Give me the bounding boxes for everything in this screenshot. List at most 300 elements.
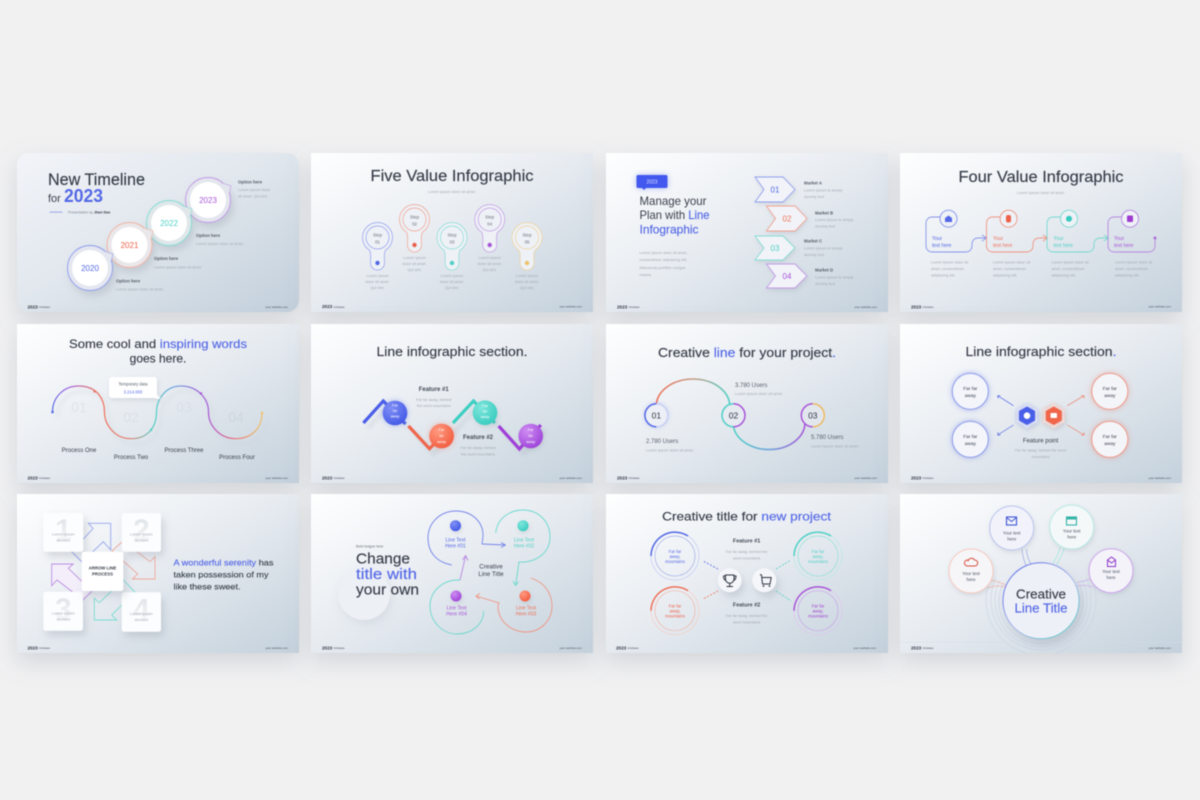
big numbers: 02: [123, 409, 139, 425]
card 3: Lorem Ipsum: [52, 610, 75, 616]
footer: Infobase: [922, 305, 934, 309]
text: descriptions: Lorem ipsum dolor sit: [931, 260, 969, 264]
node 01: Line Text: [446, 538, 466, 544]
text: feature point: Far far away, behind the word: [1015, 448, 1066, 452]
text: pin captions: Lorem ipsum: [516, 273, 538, 278]
pin: step 04: [475, 205, 505, 252]
text: option 2020: Lorem ipsum dolor sit amet.: [116, 286, 164, 292]
node 2022: [146, 200, 192, 246]
text: option 2020: Option here: [116, 278, 141, 284]
text: serenity: like these sweet.: [174, 582, 240, 592]
footer: Infobase: [628, 305, 640, 309]
footer: [911, 476, 1172, 480]
slide: Arrow line process: [17, 494, 299, 653]
hexagon: orange: [1043, 403, 1065, 428]
text: feature 2: [726, 602, 767, 624]
footer: Infobase: [628, 476, 640, 480]
ring: purple: [794, 587, 842, 635]
footer: your website.com: [1148, 304, 1172, 308]
circle: orange: Far: [439, 428, 445, 432]
loop: orange: [476, 578, 552, 632]
circle: top left: [952, 373, 988, 409]
node 2022: 2022: [160, 219, 178, 228]
title: Some cool and inspiring words: [69, 337, 247, 351]
circle: bottom left: Far far: [963, 434, 978, 440]
chevron 04: [766, 264, 807, 288]
zigzag lines: [363, 401, 541, 449]
text: users: 3.780 Users: [735, 383, 767, 389]
text: users: Lorem ipsum dolor sit amet.: [646, 448, 694, 452]
node 01: [645, 404, 668, 427]
flow: orange step: text here: [993, 243, 1013, 249]
card 3: 3: [55, 593, 72, 626]
card 4: decided: [134, 617, 148, 622]
arrow: orange: [112, 541, 155, 579]
text: pin captions: Lorem ipsum: [366, 273, 389, 278]
text: pin captions: Qui sint.: [445, 285, 459, 290]
text: descriptions: amet, consectetuer: [1052, 266, 1085, 271]
card 1: decided: [56, 538, 70, 542]
node 02: Here #02: [514, 544, 534, 550]
node 2023: 2023: [199, 196, 217, 205]
circle: top left: Far far: [963, 386, 978, 392]
circle: top left: away: [965, 394, 976, 399]
footer: your website.com: [266, 305, 289, 309]
text: users: Lorem ipsum dolor sit amet.: [735, 391, 783, 396]
text: descriptions: adipiscing elit.: [993, 272, 1017, 278]
node 02: [514, 520, 535, 550]
text: option 2023: [238, 180, 271, 198]
node 01: Here #01: [445, 544, 466, 550]
text: feature point: [1015, 438, 1066, 459]
node 03: [516, 590, 537, 618]
text: feature point: Feature point: [1023, 438, 1059, 444]
pin: step 03: Step: [447, 232, 457, 238]
text: pin captions: dolor sit amet.: [440, 279, 464, 284]
arrow: blue: [72, 523, 111, 562]
text: pin captions: dolor sit amet.: [477, 261, 502, 266]
footer: [911, 646, 1172, 650]
circle: teal: far: [483, 410, 488, 414]
flow: blue step: Your: [932, 236, 942, 242]
footer: 2023: [322, 646, 333, 650]
labels: processes: Process Four: [219, 455, 255, 461]
title: for 2023: 2023: [64, 185, 103, 206]
text: users: Lorem ipsum dolor sit amet.: [811, 444, 859, 448]
paragraph: Maecenas porttitor congue: [640, 265, 686, 270]
text: feature 2: [460, 435, 496, 456]
heading: [356, 550, 419, 598]
node 02: [722, 404, 745, 427]
footer: Infobase: [334, 476, 345, 480]
card: center: PROCESS: [92, 572, 113, 576]
text: markets: Market B: [815, 210, 833, 216]
loop: teal-purple: [430, 556, 484, 634]
circle: blue: Far: [392, 404, 399, 408]
slide: Manage your Plan: [606, 153, 888, 312]
ring: teal: away,: [813, 554, 823, 559]
circle: blue: far: [393, 409, 398, 413]
bubble: cloud: here: [966, 577, 976, 582]
text: pin captions: dolor sit amet.: [365, 279, 390, 284]
text: center title: [478, 564, 504, 578]
footer: [28, 476, 289, 480]
text: descriptions: amet, consectetuer: [931, 266, 965, 271]
text: serenity: taken possession of my: [174, 570, 269, 580]
text: feature 2: Far far away, behind: [460, 445, 496, 450]
pin: step 03: 03: [450, 240, 455, 244]
card 1: [43, 513, 83, 552]
heading: Manage your: [640, 194, 707, 208]
chevron 01: 01: [771, 186, 780, 194]
pin: step 02: Step: [410, 214, 420, 220]
chevron 02: 02: [783, 214, 792, 224]
footer: your website.com: [854, 646, 877, 650]
footer: 2023: [911, 646, 922, 650]
loop: blue: [428, 511, 506, 565]
ring: purple: away,: [813, 609, 823, 614]
title: Creative line for your project .: [658, 345, 836, 360]
pin: step 05: 05: [525, 240, 530, 244]
pin: step 01: 01: [375, 240, 380, 244]
slide: Line infographic section A: [311, 324, 593, 483]
text: pin captions: dolor sit amet.: [402, 261, 427, 266]
flow: purple step: Your: [1114, 236, 1124, 242]
text: users: 2.780 Users: [646, 439, 678, 445]
node 2020: 2020: [81, 264, 99, 273]
circle: purple: [518, 424, 543, 448]
slide: Change title with your own: [311, 494, 593, 653]
flow: teal step: Your: [1054, 236, 1064, 242]
slide: Five Value Infographic: [311, 153, 593, 312]
footer: Infobase: [922, 476, 934, 480]
title: Line infographic section.: [376, 344, 528, 359]
text: feature 2: Feature #2: [733, 602, 760, 608]
text: eyebrow: Bold tongue here: [356, 544, 383, 548]
big numbers: [71, 399, 244, 425]
footer: 2023: [28, 304, 38, 310]
text: markets: Market C: [804, 238, 822, 244]
pin: step 05: [512, 223, 542, 270]
title: goes here.: [130, 352, 186, 366]
node 02: 02: [729, 410, 738, 420]
text: descriptions: amet, consectetuer: [1115, 266, 1149, 271]
text: option 2020: [116, 278, 164, 292]
footer: 2023: [322, 304, 333, 309]
flow: teal step: [1047, 210, 1108, 252]
badge: 2023: 2023: [646, 180, 658, 186]
heading: title with: [356, 566, 417, 583]
labels: processes: Process Three: [165, 448, 204, 454]
ring: blue: mountains: [665, 559, 685, 564]
text: feature 1: Feature #1: [733, 538, 760, 544]
paragraph: [640, 250, 688, 277]
card 4: Lorem Ipsum: [130, 611, 153, 616]
ring: orange: mountains: [665, 614, 685, 619]
footer: [911, 304, 1172, 310]
arrows: orange: [1067, 396, 1084, 435]
footer: your website.com: [560, 304, 583, 308]
paragraph: Lorem ipsum dolor sit amet,: [640, 250, 688, 255]
text: option 2023: sit amet. Qui sint.: [238, 194, 268, 198]
text: option 2022: Lorem ipsum dolor sit amet.: [196, 241, 244, 246]
text: feature 1: Feature #1: [419, 387, 449, 393]
footer: 2023: [617, 476, 628, 480]
text: option 2023: Option here: [238, 180, 263, 184]
bubble: cloud: Your text: [962, 571, 981, 576]
pin: step 05: Step: [522, 232, 532, 238]
arcs: [656, 379, 805, 450]
node 03: 03: [808, 410, 818, 420]
flow: teal step: text here: [1054, 243, 1073, 249]
chevron 02: [766, 206, 807, 231]
bubble: mail: Your text: [1003, 530, 1021, 536]
paragraph: consectetuer adipiscing elit.: [640, 257, 687, 262]
slide: Four Value Infographic: [900, 153, 1182, 312]
footer: [322, 304, 583, 309]
callout: temporary data: 3.214.000: [124, 390, 143, 394]
text: option 2021: Lorem ipsum dolor sit amet.: [154, 264, 202, 270]
footer: your website.com: [560, 646, 583, 650]
text: pin captions: Lorem ipsum: [441, 273, 463, 278]
text: feature 2: the word mountains: [461, 452, 495, 456]
text: option 2023: Lorem ipsum dolor: [238, 187, 271, 192]
text: feature 1: Far far away, behind the: [726, 549, 767, 554]
card 1: Lorem Ipsum: [52, 532, 75, 536]
circle: top right: Far far: [1103, 386, 1117, 392]
text: feature 1: the word mountains: [417, 403, 451, 408]
card 4: [122, 592, 161, 632]
circle: orange: far: [439, 434, 445, 438]
ring: orange: [651, 587, 699, 635]
slide: Creative Line Title: [900, 494, 1182, 655]
decorative sphere: [338, 547, 414, 620]
pin: step 04: 04: [487, 222, 493, 226]
footer: [322, 476, 583, 480]
flow: orange step: [986, 210, 1048, 252]
text: markets: Lorem ipsum is simply: [815, 217, 854, 222]
footer: Infobase: [39, 646, 50, 650]
title: for 2023: for: [48, 193, 61, 205]
footer: 2023: [616, 646, 627, 650]
card 2: decided: [134, 538, 148, 542]
circle: bottom right: [1092, 421, 1128, 457]
circle: bottom right: Far far: [1103, 434, 1117, 440]
node 2023: [186, 178, 231, 222]
text: pin captions: Qui sint.: [370, 285, 385, 290]
footer: your website.com: [1148, 646, 1172, 650]
text: descriptions: adipiscing elit.: [931, 272, 955, 278]
ring: teal: mountains: [808, 559, 828, 564]
text: feature 1: [726, 538, 767, 560]
text: pin captions: Lorem ipsum: [403, 255, 426, 260]
subtitle: Lorem ipsum dolor sit amet.: [428, 189, 476, 194]
node 01: 01: [652, 410, 661, 420]
big numbers: 04: [228, 409, 244, 425]
text: center title: Line Title: [478, 571, 504, 578]
text: feature 1: [416, 387, 451, 408]
footer: 2023: [28, 476, 38, 480]
ring: blue: Far far: [669, 549, 682, 554]
card 2: [122, 513, 161, 552]
text: feature 1: Far far away, behind: [416, 397, 451, 402]
footer: Infobase: [39, 305, 50, 309]
circle: top right: away: [1104, 394, 1116, 399]
heading: your own: [356, 582, 419, 598]
footer: your website.com: [560, 476, 583, 480]
dashed arrows: [703, 560, 791, 601]
circle: bottom left: away: [965, 442, 976, 447]
bubble: calendar: here: [1067, 534, 1077, 540]
text: option 2022: Option here: [196, 233, 221, 238]
slide: Creative line for your project: [606, 324, 888, 483]
ring: purple: Far far: [812, 604, 825, 609]
text: option 2022: [196, 233, 244, 246]
circle: blue: [383, 401, 407, 425]
footer: [617, 304, 878, 310]
slide: New Timeline for 2023: [17, 153, 299, 312]
node 03: Here #03: [516, 612, 536, 618]
circle: orange: away: [437, 440, 446, 444]
text: pin captions: [365, 255, 539, 290]
text: markets: Lorem ipsum is simply: [815, 274, 854, 280]
text: feature 2: Far far away, behind the: [726, 613, 767, 618]
text: pin captions: Qui sint.: [407, 267, 422, 272]
heading: Plan with Line: [640, 208, 710, 222]
paragraph: massa.: [640, 272, 652, 277]
text: feature 2: Feature #2: [463, 435, 494, 441]
bubble: cloud: [949, 549, 1007, 593]
footer: 2023: [322, 476, 333, 480]
text: pin captions: Qui sint.: [483, 267, 497, 272]
title: Four Value Infographic: [958, 169, 1124, 186]
pin: step 02: [400, 205, 430, 252]
icon: trophy: [718, 568, 742, 592]
card 3: [43, 592, 83, 631]
text: feature point: mountains: [1032, 454, 1050, 459]
ring: orange: Far far: [669, 604, 682, 609]
big numbers: 01: [71, 399, 87, 415]
ring: teal: [794, 532, 842, 580]
title: New Timeline: New Timeline: [48, 171, 145, 189]
footer: your website.com: [854, 305, 878, 309]
footer: [28, 304, 289, 310]
footer: 2023: [28, 646, 38, 650]
footer: your website.com: [854, 476, 878, 480]
text: descriptions: adipiscing elit.: [1115, 272, 1139, 278]
text: pin captions: Lorem ipsum: [478, 255, 501, 260]
title: Five Value Infographic: [370, 168, 534, 185]
node 04: Here #04: [446, 612, 467, 618]
ring: orange: away,: [670, 609, 680, 614]
card 1: 1: [55, 514, 72, 547]
center circle: Line Title: [1014, 602, 1068, 616]
zigzag shadows: [368, 406, 546, 454]
footer: Infobase: [922, 646, 934, 650]
chevron 03: [755, 236, 795, 260]
circle: teal: away: [481, 415, 490, 419]
circle: bottom left: [952, 421, 988, 457]
text: markets: Market D: [815, 268, 833, 272]
circle: purple: away: [526, 440, 535, 444]
text: markets: dummy text: [815, 281, 836, 286]
node 03: Line Text: [516, 606, 537, 612]
card 2: 2: [133, 514, 150, 547]
node 2021: 2021: [121, 241, 139, 250]
flow: purple step: [1108, 210, 1156, 252]
footer: Infobase: [334, 646, 345, 650]
card 3: decided: [56, 616, 70, 622]
heading: [640, 194, 710, 236]
footer: 2023: [911, 476, 922, 480]
text: descriptions: [931, 260, 1153, 278]
text: descriptions: Lorem ipsum dolor sit: [1052, 260, 1090, 264]
heading: Change: [356, 550, 410, 568]
node 03: [801, 404, 824, 427]
circle: teal: Far: [482, 404, 489, 408]
flow: blue step: text here: [932, 243, 952, 249]
text: descriptions: amet, consectetuer: [993, 266, 1027, 271]
text: serenity: [174, 558, 274, 592]
text: feature 1: word mountains: [733, 556, 760, 560]
footer: [322, 646, 583, 650]
badge: 2023: [636, 175, 668, 190]
card: center: ARROW LINE: [89, 566, 116, 570]
text: option 2021: [154, 256, 202, 270]
text: pin captions: dolor sit amet.: [515, 279, 539, 284]
labels: processes: Process One: [62, 448, 97, 454]
ring: blue: away,: [670, 554, 680, 559]
presenter line: Presentation by Jhon Doe: [68, 211, 110, 215]
center circle: Creative: [1016, 588, 1066, 602]
circle: purple: Far: [528, 428, 534, 432]
text: markets: dummy text: [804, 194, 825, 199]
heading: Infographic: [640, 222, 699, 236]
presenter line: [50, 211, 110, 215]
circle: blue: away: [391, 414, 400, 418]
footer: 2023: [911, 304, 922, 310]
footer: your website.com: [266, 476, 289, 480]
footer: Infobase: [334, 305, 345, 309]
title: for 2023: [48, 185, 103, 206]
bubble: mail: [990, 506, 1034, 566]
card: center: [82, 552, 123, 591]
text: center title: Creative: [479, 564, 503, 570]
arrow: teal: [94, 580, 135, 620]
circle: purple: far: [528, 434, 534, 438]
pin: step 04: Step: [485, 214, 495, 220]
card 2: Lorem Ipsum: [130, 532, 153, 536]
pin: step 02: 02: [412, 222, 417, 226]
flow: purple step: text here: [1114, 243, 1134, 249]
labels: processes: Process Two: [114, 455, 149, 461]
text: pin captions: Qui sint.: [520, 285, 534, 290]
chevron 03: 03: [771, 244, 780, 253]
wave nodes: [51, 390, 263, 431]
text: descriptions: adipiscing elit.: [1052, 272, 1076, 278]
arrows: blue: [998, 396, 1014, 435]
node 04: Line Text: [447, 606, 467, 612]
node 2020: [68, 246, 113, 290]
text: serenity: A wonderful serenity has: [174, 558, 274, 568]
icon: cart: [752, 568, 776, 592]
node 04: [446, 590, 467, 618]
circle: bottom right: away: [1104, 442, 1116, 447]
footer: [617, 476, 878, 480]
text: option 2021: Option here: [154, 256, 179, 261]
bubble: calendar: [1050, 505, 1094, 565]
wave line: [52, 386, 262, 439]
